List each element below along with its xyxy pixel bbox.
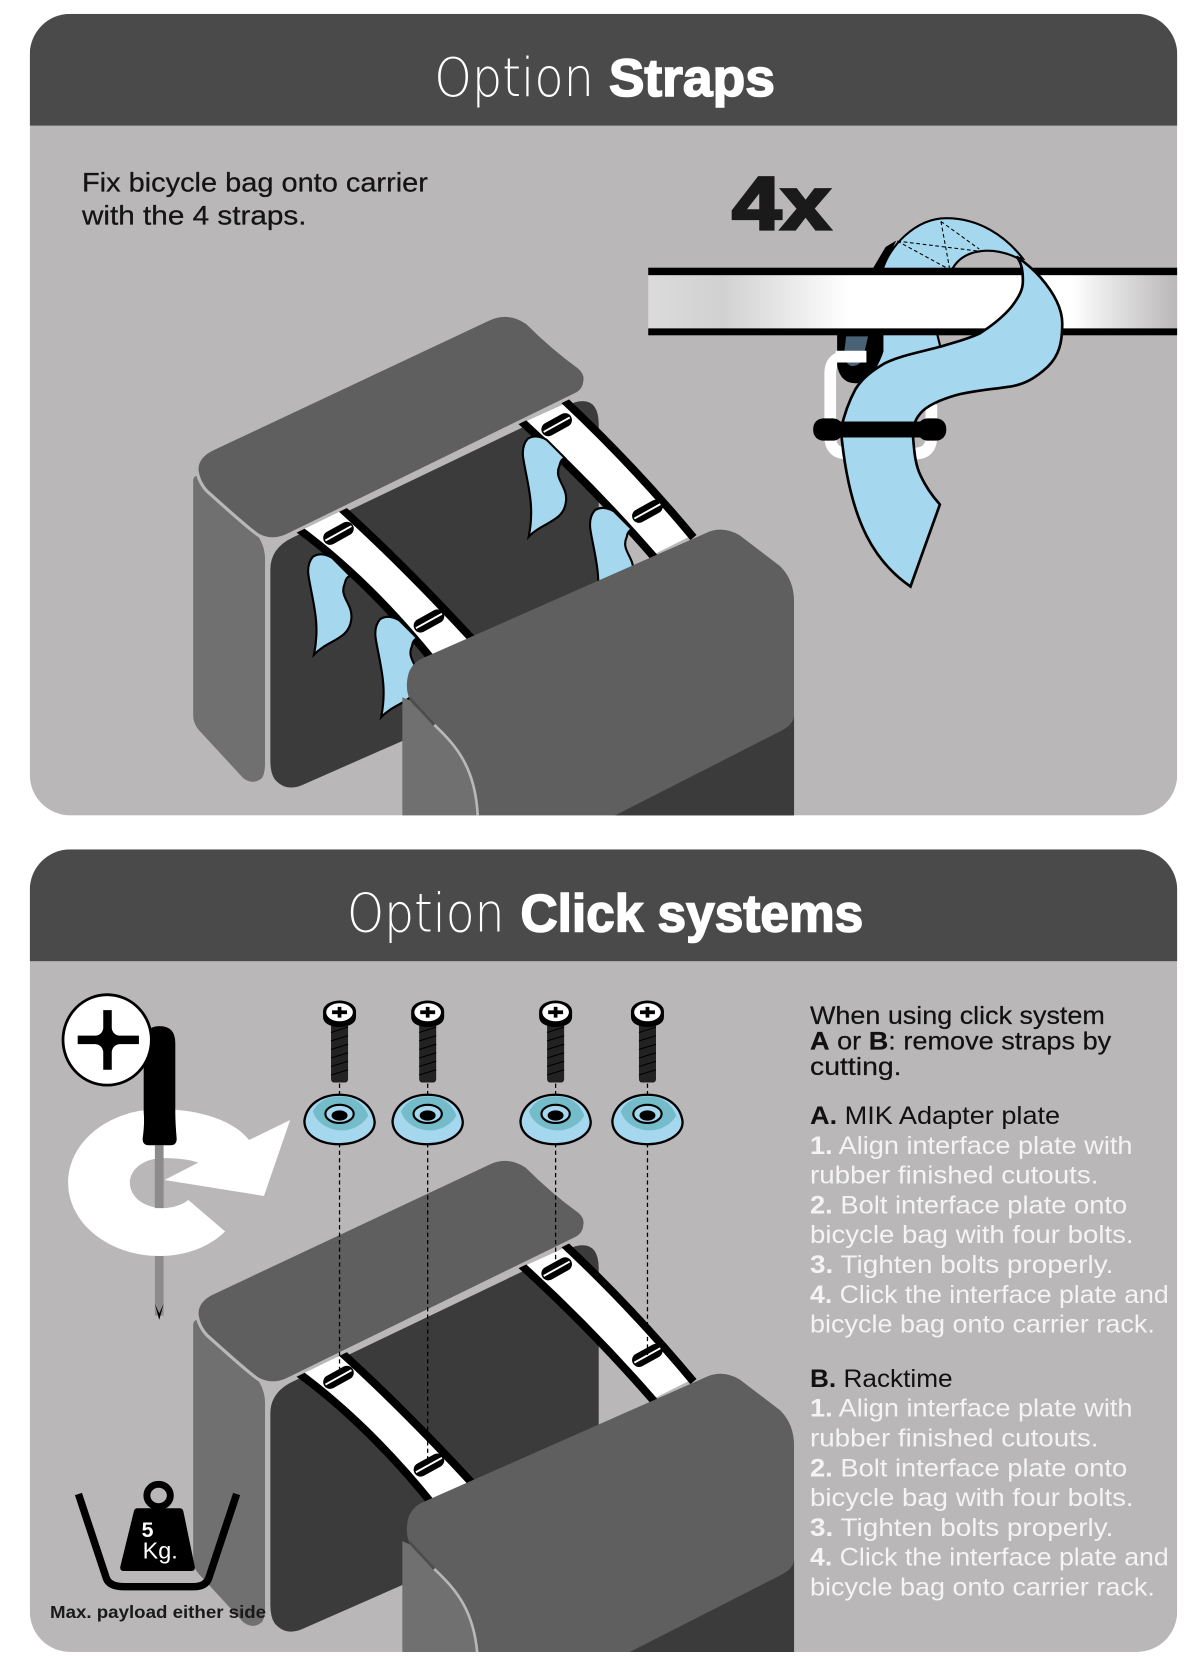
text: A MIK adapter plate steps: 2. Bolt interface plate onto xyxy=(810,1191,1127,1219)
panel: option click systems xyxy=(30,849,1177,1669)
text: B Racktime steps: rubber finished cutouts. xyxy=(810,1425,1098,1453)
text: A MIK adapter plate steps: 3. Tighten bolts properly. xyxy=(810,1251,1113,1279)
text: B Racktime steps: 2. Bolt interface plate onto xyxy=(810,1454,1127,1482)
text: B Racktime steps: B. Racktime xyxy=(810,1365,953,1393)
text: B Racktime steps: bicycle bag onto carrier rack. xyxy=(810,1574,1155,1602)
title: option click systems: Click systems xyxy=(520,884,863,943)
text: A MIK adapter plate steps: A. MIK Adapter plate xyxy=(810,1102,1060,1130)
icon: 5 kg payload xyxy=(78,1484,237,1587)
icon: strap tabs xyxy=(308,436,633,717)
text: A MIK adapter plate steps xyxy=(810,1102,1169,1339)
icon: screwdriver and rotate arrow xyxy=(63,995,290,1320)
text: B Racktime steps: 3. Tighten bolts properly. xyxy=(810,1514,1113,1542)
text: A MIK adapter plate steps: 4. Click the interface plate and xyxy=(810,1281,1169,1309)
title: option straps: Straps xyxy=(609,49,775,108)
text: fix bag instruction: Fix bicycle bag onto carrier xyxy=(82,167,428,198)
text: click system intro: cutting. xyxy=(810,1053,902,1081)
text: click system intro: A or B: remove straps by xyxy=(810,1028,1112,1056)
text: A MIK adapter plate steps: rubber finished cutouts. xyxy=(810,1162,1098,1190)
icon: phillips head xyxy=(63,995,151,1085)
label: 4x: 4x xyxy=(732,162,830,245)
text: click system intro: When using click system xyxy=(810,1002,1105,1030)
text: A MIK adapter plate steps: bicycle bag with four bolts. xyxy=(810,1221,1134,1249)
title: option click systems: Option xyxy=(347,882,505,944)
text: payload caption: Max. payload either side xyxy=(50,1602,266,1622)
illustration: bag with straps xyxy=(193,315,794,825)
text: B Racktime steps: bicycle bag with four bolts. xyxy=(810,1484,1134,1512)
panel: option straps xyxy=(30,14,1177,825)
icon: 5 kg payload: Kg. xyxy=(143,1537,178,1563)
text: B Racktime steps: 4. Click the interface plate and xyxy=(810,1544,1169,1572)
illustration: bag with click bolts xyxy=(193,1159,794,1669)
header: option click systems xyxy=(30,849,1177,961)
text: B Racktime steps: 1. Align interface plate with xyxy=(810,1395,1133,1423)
rail xyxy=(648,271,1177,332)
text: fix bag instruction xyxy=(81,167,428,231)
text: A MIK adapter plate steps: bicycle bag onto carrier rack. xyxy=(810,1311,1155,1339)
dashed alignment lines xyxy=(340,1084,647,1465)
text: fix bag instruction: with the 4 straps. xyxy=(81,200,307,231)
text: B Racktime steps xyxy=(810,1365,1169,1602)
text: A MIK adapter plate steps: 1. Align interface plate with xyxy=(810,1132,1133,1160)
illustration: strap around carrier rail xyxy=(648,218,1177,586)
text: click system intro xyxy=(810,1002,1112,1081)
header: option straps xyxy=(30,14,1177,126)
icon: bolts and washers xyxy=(304,1001,683,1144)
icon: 5 kg payload: 5 xyxy=(142,1518,154,1542)
title: option straps: Option xyxy=(434,47,594,109)
